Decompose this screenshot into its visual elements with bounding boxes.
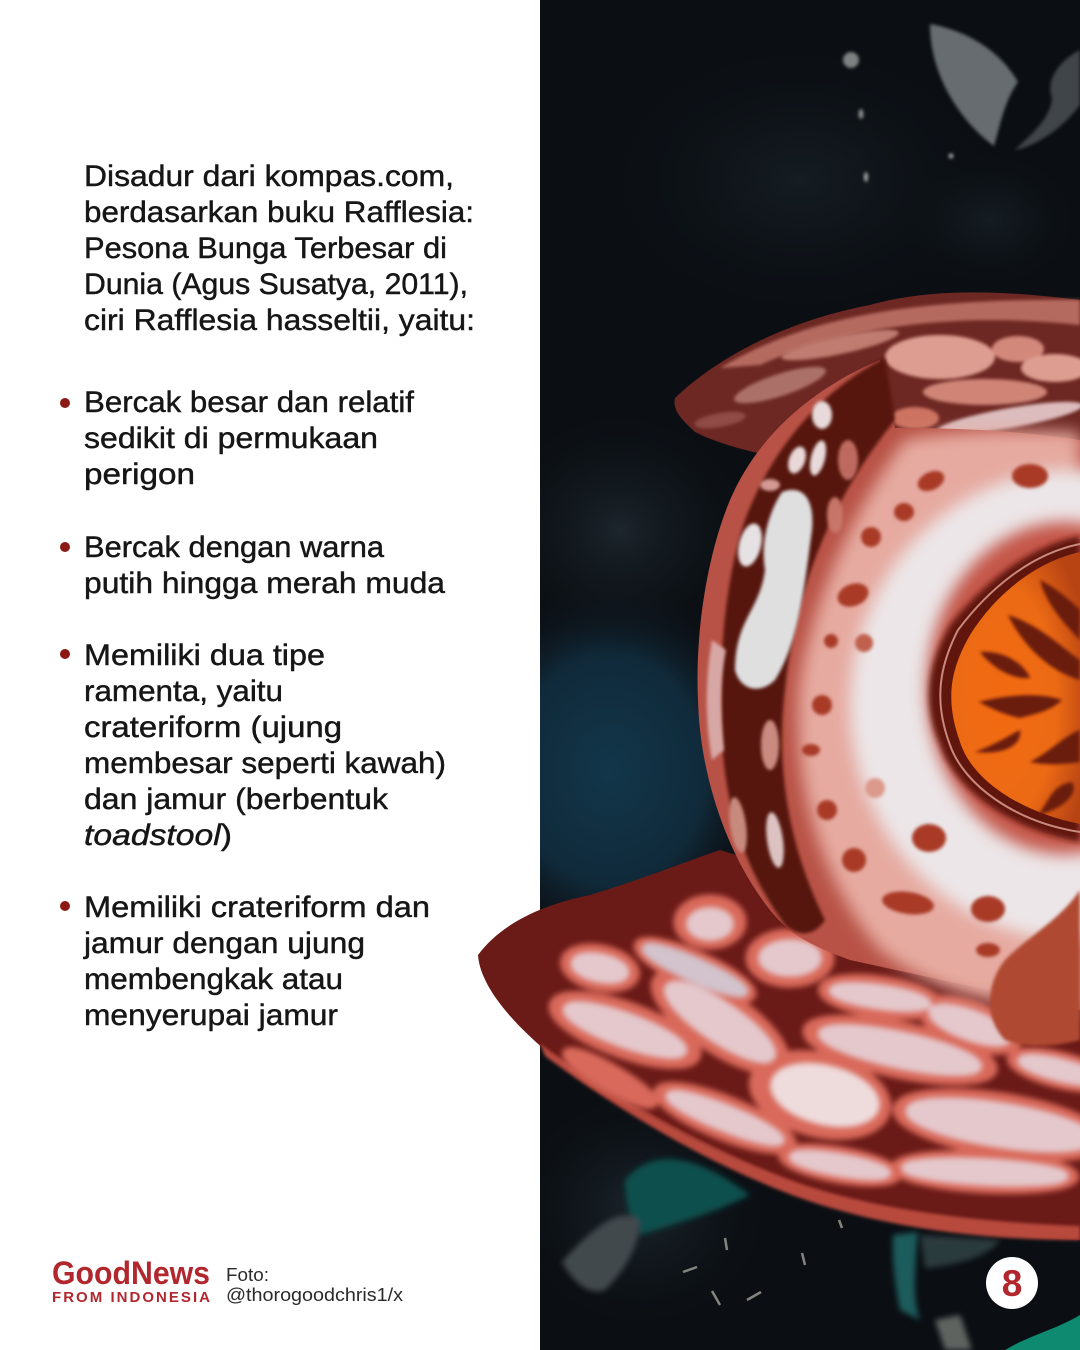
bullet item 1: perigon <box>84 458 195 491</box>
flower: top petal <box>674 292 1080 470</box>
bullet item 3: ramenta, yaitu <box>84 675 283 708</box>
bullet item 3: membesar seperti kawah) <box>84 747 446 780</box>
bullet item 1: sedikit di permukaan <box>84 422 378 455</box>
logo: GoodNews from Indonesia <box>52 1255 210 1306</box>
intro paragraph: Pesona Bunga Terbesar di <box>84 232 447 265</box>
bullet item 3: Memiliki dua tipe <box>84 639 325 672</box>
photo: pale leaf upper right <box>843 24 1080 182</box>
photo: teal leaves and debris at bottom <box>562 1159 1080 1350</box>
bullet item 2 <box>60 531 445 600</box>
panel: photo background <box>540 0 1080 1350</box>
intro paragraph: berdasarkan buku Rafflesia: <box>84 196 474 229</box>
logo: GoodNews from Indonesia: GoodNews <box>52 1255 210 1291</box>
intro paragraph: Dunia (Agus Susatya, 2011), <box>84 268 468 301</box>
intro paragraph: ciri Rafflesia hasseltii, yaitu: <box>84 304 475 337</box>
photo credit <box>226 1265 403 1305</box>
bullet item 1: Bercak besar dan relatif <box>84 386 415 419</box>
flower: lower right lobe <box>990 890 1080 1046</box>
bullet item 3: dan jamur (berbentuk <box>84 783 389 816</box>
flower: white patches on side band <box>726 401 858 869</box>
bullet item 3: crateriform (ujung <box>84 711 342 744</box>
page number badge <box>986 1257 1038 1309</box>
flower: central body with side band <box>697 358 1080 1010</box>
flower: bottom petal <box>478 850 1080 1240</box>
panel: white text column <box>0 0 540 1350</box>
photo credit: Foto: <box>226 1265 269 1285</box>
intro paragraph <box>84 160 475 337</box>
logo: GoodNews from Indonesia: FROM INDONESIA <box>52 1289 210 1306</box>
bullet item 4: jamur dengan ujung <box>83 927 365 960</box>
bullet item 3 <box>60 639 446 852</box>
bullet item 2: putih hingga merah muda <box>84 567 445 600</box>
bullet item 4: menyerupai jamur <box>84 999 338 1032</box>
bullet item 3: toadstool ) <box>84 819 232 852</box>
bullet item 4: Memiliki crateriform dan <box>84 891 430 924</box>
intro paragraph: Disadur dari kompas.com, <box>84 160 454 193</box>
flower: pale disk <box>798 431 1080 1010</box>
flower: orange disc centre with spikes <box>927 522 1080 854</box>
bullet item 4 <box>60 891 430 1032</box>
flower: red spots on disk <box>802 464 1048 957</box>
bullet item 2: Bercak dengan warna <box>84 531 384 564</box>
bullet item 4: membengkak atau <box>84 963 343 996</box>
photo credit: @thorogoodchris1/x <box>226 1285 403 1305</box>
bullet item 1 <box>60 386 415 491</box>
page number badge: 8 <box>1002 1263 1022 1304</box>
